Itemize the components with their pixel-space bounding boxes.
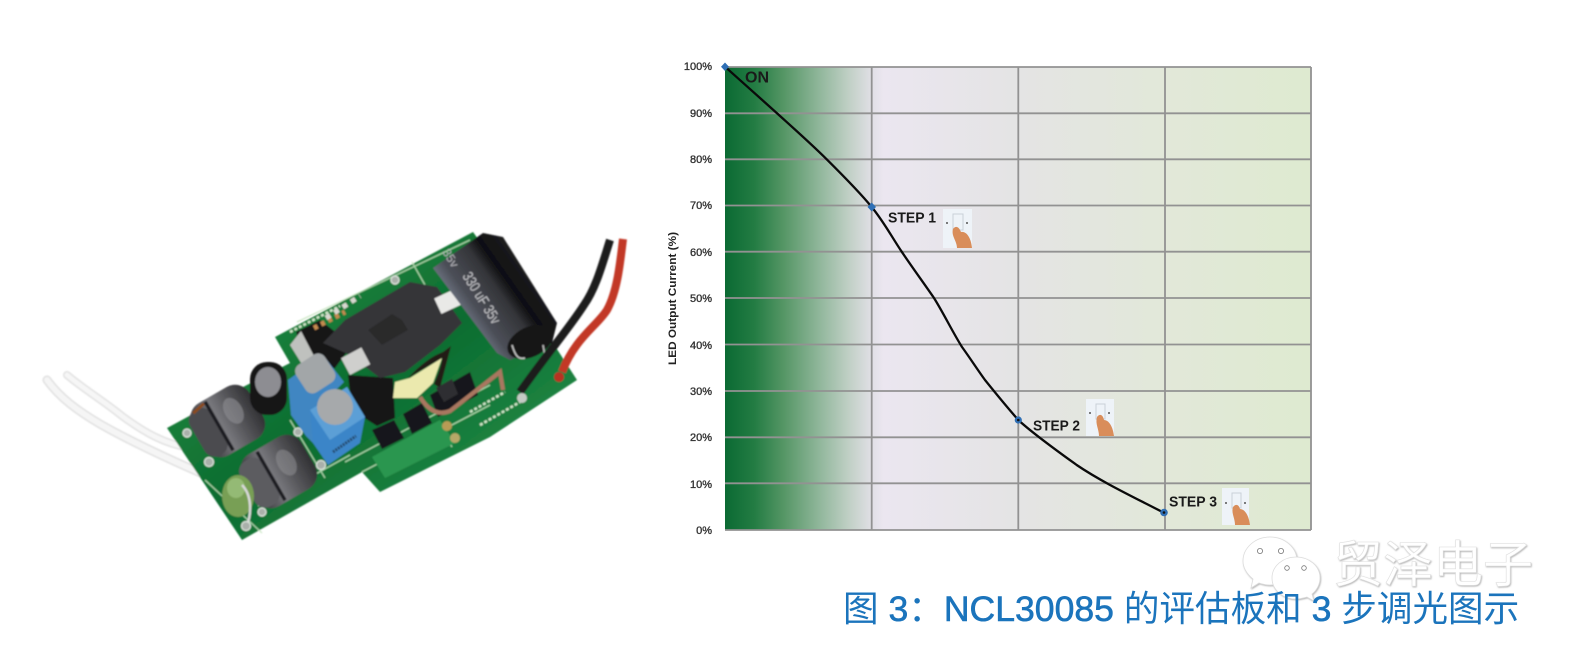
photo: NCL30085 evaluation board [47,232,623,540]
transformer [323,282,462,426]
watermark: WeChat icon [1243,537,1320,601]
label: STEP 3: STEP 3 [1169,494,1217,510]
y axis tick labels: 90% [690,108,712,120]
y axis tick labels: 0% [696,525,712,537]
data point markers [721,62,1168,516]
y axis tick labels: 50% [690,293,712,305]
small electrolytic capacitor [250,362,287,415]
lower input inductor [233,429,323,515]
label: ON: ON [745,70,769,86]
black connectors [372,372,478,449]
white input wires [47,375,212,478]
chart: LED output current vs dimming step [667,61,1311,537]
label: STEP 2: STEP 2 [1033,418,1080,434]
dimming curve [725,67,1163,512]
green circuit board [167,232,577,540]
y axis tick labels: 30% [690,386,712,398]
y axis tick labels: 40% [690,340,712,352]
caption: 图 3：NCL30085 的评估板和 3 步调光图示 [843,589,1519,629]
small parts and silver tab on board top [290,296,360,368]
icon: hand on switch, step 3 [1222,488,1250,525]
y axis title: LED Output Current (%) [667,232,679,365]
output wires red and black [517,239,623,403]
y axis tick labels: 80% [690,154,712,166]
y axis tick labels: 100% [684,61,712,73]
icon: hand on switch, step 1 [943,209,972,248]
y axis tick labels: 10% [690,479,712,491]
label: STEP 1: STEP 1 [888,210,936,226]
chart plot background [725,67,1311,530]
icon: hand on switch, step 2 [1086,399,1114,436]
solder pads [183,276,399,470]
y axis tick labels [684,61,712,537]
watermark: brand text: 贸泽电子 [1333,537,1533,593]
brown twisted wire [420,372,503,413]
upper input inductor [182,379,271,464]
green LED / thermistor [222,475,266,530]
y axis tick labels: 70% [690,200,712,212]
large electrolytic capacitor [433,233,558,366]
y axis tick labels: 60% [690,247,712,259]
capacitor printed value: 330 uF 35v [459,269,504,328]
y axis tick labels: 20% [690,432,712,444]
capacitor printed voltage: 35v [439,246,462,270]
blue film capacitors [288,350,365,465]
